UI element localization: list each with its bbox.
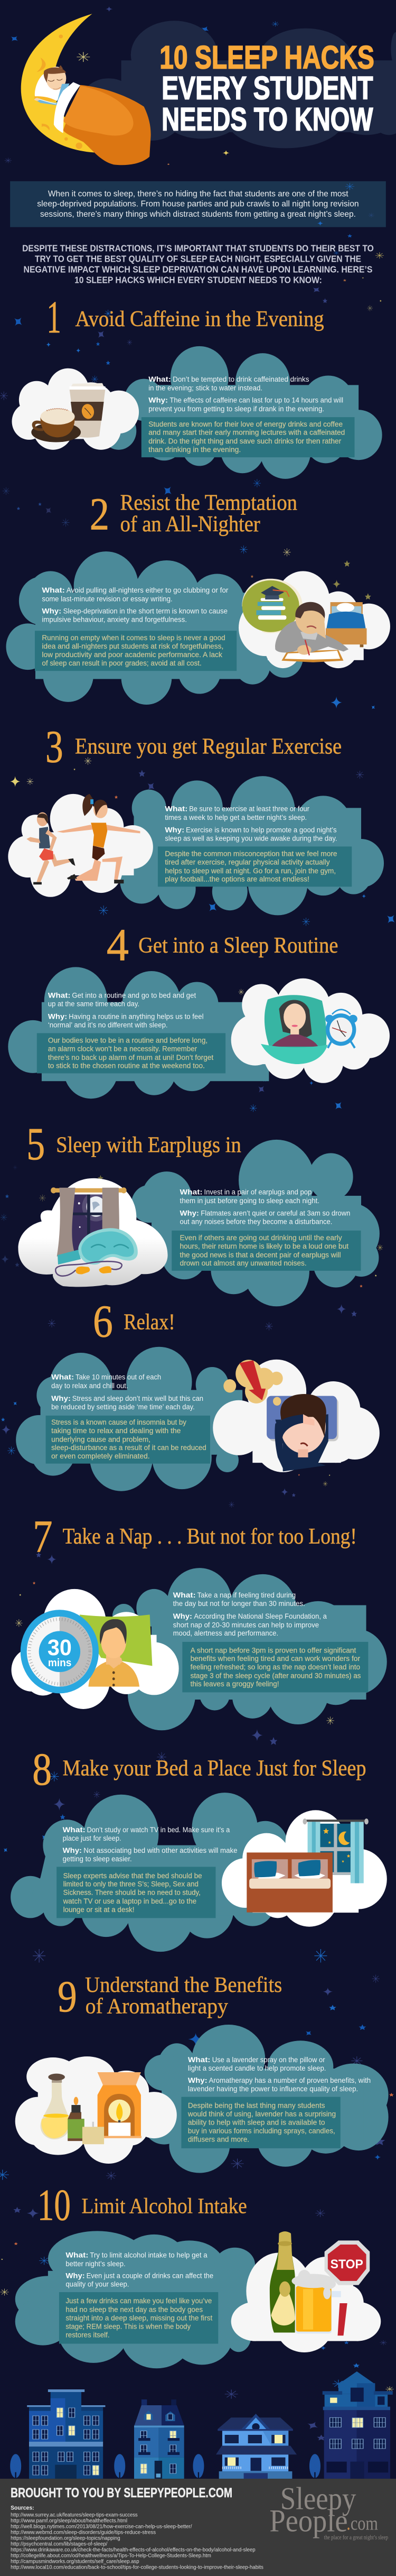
panel 8 text: Not associating bed with other activities will make [83, 1846, 238, 1854]
panel 7 text: short nap of 20-30 minutes can help to improve [173, 1621, 319, 1629]
sources list: http://collegelife.about.com/od/healthwellness/a/Tips-To-Help-College-Students-Sleep.htm [11, 2552, 211, 2559]
teal cloud panel 2 [6, 551, 303, 705]
panel 7 text [173, 1591, 327, 1637]
panel 2 text [42, 586, 229, 623]
panel 3 highlight box: tired after exercise, regular physical activity actually [165, 858, 330, 866]
panel 1 text: in the evening; stick to water instead. [148, 384, 262, 392]
icon: stop sign [325, 2240, 370, 2335]
sections 5 and 6 [1, 1119, 383, 1564]
panel 2 text: What: [42, 586, 65, 594]
panel 2 text: Sleep-deprivation in the short term is known to cause [63, 607, 228, 615]
intro panel [10, 181, 386, 227]
icon: 30 minute timer [21, 1610, 99, 1693]
icon: woman sleeping on pillow [261, 995, 328, 1064]
panel 3 highlight box: play football...the options are almost endless! [165, 875, 309, 883]
teal cloud panel 1 [101, 346, 382, 479]
panel 1 highlight box: and many start their early morning lectures with a caffeinated [148, 428, 345, 437]
sections 7 and 8 [2, 1568, 387, 1983]
panel 2 highlight box: of sleep can result in poor grades; avoid at all cost. [42, 659, 202, 667]
panel 7 highlight box: A short nap before 3pm is proven to offer significant [191, 1646, 356, 1654]
moon [21, 14, 101, 153]
panel 1 text: What: [148, 375, 171, 383]
heading 9: of Aromatherapy [86, 1995, 228, 2018]
panel 5 text: Invest in a pair of earplugs and pop [204, 1188, 312, 1196]
panel 7 text: the day but not for longer than 30 minutes. [173, 1600, 305, 1608]
dark cloud behind title [81, 21, 396, 148]
icon: small candle [82, 2122, 104, 2144]
white cloud with eye mask and window [18, 1178, 168, 1287]
heading 10 [37, 2180, 247, 2230]
icon: earplugs [55, 1261, 122, 1276]
icon: bed with pillows [247, 1852, 333, 1913]
panel 8 highlight box [56, 1867, 215, 1918]
panel 7 highlight box: this leaves a groggy feeling! [191, 1680, 279, 1688]
icon: alarm clock [325, 1010, 357, 1048]
panel 5 highlight box: drown out almost any unwanted noises. [180, 1259, 307, 1267]
heading 6: 6 [93, 1296, 113, 1347]
stars around sections 5 and 6 [1, 1165, 383, 1564]
panel 3 text [165, 805, 337, 843]
panel 1 highlight box: drink. Do the right thing and save such drinks for then rather [148, 437, 342, 445]
panel 2 highlight box [35, 631, 237, 671]
panel 10 highlight box: stage; REM sleep. This is when the body [65, 2323, 191, 2331]
panel 7 text: Take a nap if feeling tired during [197, 1591, 296, 1599]
town stars [225, 2340, 394, 2441]
panel 1 text: Why: [148, 396, 168, 404]
heading 2: of an All-Nighter [120, 512, 260, 536]
icon: stop sign: STOP [331, 2257, 363, 2271]
icon: student writing [275, 602, 348, 662]
panel 8 highlight box: watch TV or use a laptop in bed...go to the [63, 1897, 196, 1905]
panel 9 highlight box: buy in various forms including sprays, candles, [188, 2127, 335, 2135]
panel 1 text: prevent you from getting to sleep if drank in the evening. [148, 404, 324, 413]
heading 9: 9 [58, 1971, 77, 2021]
icon: man napping on pillow [80, 1614, 152, 1687]
icon: stress cloud with red arrow [223, 1360, 283, 1406]
sections 9 and 10 [0, 1971, 394, 2368]
heading 5 [26, 1119, 241, 1170]
panel 1 text: Don’t be tempted to drink caffeinated drinks [173, 375, 309, 383]
sources list: http://psychcentral.com/lib/stages-of-sleep/ [11, 2541, 108, 2547]
sources list: http://campusmindworks.org/students/self_care/sleep.asp [11, 2558, 139, 2564]
heading 7 [33, 1511, 357, 1562]
building 1 [27, 2389, 105, 2479]
heading 8: Make your Bed a Place Just for Sleep [63, 1756, 366, 1780]
stars around sections 9 and 10 [0, 1988, 394, 2295]
panel 4 highlight box: Our bodies love to be in a routine and before long, [48, 1036, 208, 1045]
panel 7 highlight box [182, 1642, 368, 1692]
heading 2: 2 [90, 489, 109, 540]
panel 4 text: ‘normal’ and it’s no different with sleep. [48, 1021, 168, 1029]
panel 5 highlight box [172, 1231, 361, 1271]
intro text [37, 189, 359, 218]
icon: sleep mask [58, 1228, 138, 1264]
building 4 [323, 2371, 393, 2479]
panel 9 text: Use a lavender spray on the pillow or [212, 2056, 325, 2064]
intro statement in capitals [22, 244, 374, 285]
panel 6 text: Take 10 minutes out of each [76, 1373, 161, 1381]
icon: 30 minute timer: 30 [48, 1635, 72, 1660]
teal cloud panel 10 [15, 2231, 255, 2368]
panel 4 text [48, 991, 204, 1029]
panel 3 text: What: [165, 805, 187, 813]
icon: 30 minute timer: mins [48, 1657, 71, 1669]
panel 5 text: What: [180, 1188, 203, 1196]
panel 8 text: Don’t study or watch TV in bed. Make sure it’s a [87, 1826, 230, 1834]
panel 9 text: What: [188, 2056, 210, 2064]
panel 10 text: What: [65, 2251, 88, 2259]
white cloud with runners [8, 794, 153, 897]
icon: mug of beer [291, 2270, 341, 2333]
white cloud with alcohol and stop sign [231, 2231, 381, 2352]
panel 2 highlight box: Running on empty when it comes to sleep is never a good [42, 634, 225, 642]
white cloud with aromatherapy items [15, 2056, 177, 2164]
panel 5 text: Flatmates aren’t quiet or careful at 3am so drown [201, 1209, 350, 1217]
heading 3: Ensure you get Regular Exercise [75, 734, 342, 759]
orange blanket [54, 82, 151, 165]
panel 5 text: Why: [180, 1209, 199, 1217]
sources list [11, 2512, 263, 2570]
teal cloud panel 4 [8, 967, 269, 1098]
panel 6 highlight box: underlying cause and problem, [51, 1435, 150, 1443]
teal cloud panel 9 [144, 2025, 389, 2173]
heading 8: 8 [32, 1744, 52, 1795]
panel 10 highlight box [59, 2292, 218, 2344]
stars around sections 1 and 2 [0, 298, 382, 711]
panel 8 text: place just for sleep. [63, 1834, 121, 1842]
sections 3 and 4 [8, 722, 396, 1113]
building 2 [134, 2399, 184, 2479]
panel 10 highlight box: Just a few drinks can make you feel like you’ve [65, 2297, 212, 2305]
sources list: http://www.pamf.org/sleep/about/healtheffects.html [11, 2517, 127, 2524]
panel 3 highlight box: Despite the common misconception that we feel more [165, 850, 337, 858]
white cloud with sleeper and clock [231, 978, 390, 1083]
icon: dropper bottle [68, 2097, 84, 2141]
white cloud with student [239, 571, 390, 668]
footer [0, 2479, 396, 2576]
panel 6 highlight box: or even completely eliminated. [51, 1452, 150, 1460]
heading 6 [93, 1296, 175, 1347]
panel 10 text: better night’s sleep. [65, 2260, 126, 2268]
heading 4: Get into a Sleep Routine [138, 933, 338, 957]
white cloud with coffee [12, 368, 139, 450]
panel 9 highlight box: would think of using, lavender has a surprising [187, 2110, 336, 2118]
panel 3 text: Exercise is known to help promote a good night’s [186, 826, 337, 834]
panel 3 text: sleep as well as keeping you wide awake during the day. [165, 834, 337, 843]
icon: bed [326, 602, 366, 647]
panel 3 highlight box [158, 846, 352, 887]
panel 4 highlight box: there’s no back up alarm of mum at uni! Don’t forget [48, 1054, 213, 1061]
white cloud with nap timer [12, 1589, 179, 1709]
white cloud with bed and window [222, 1810, 387, 1927]
panel 3 highlight box: helps to sleep well at night. Go for a run, join the gym, [165, 866, 336, 875]
icon: carafe of oil [40, 2074, 70, 2139]
heading 1: Avoid Caffeine in the Evening [76, 307, 324, 331]
heading 3 [45, 722, 342, 772]
panel 6 text: be reduced by setting aside ‘me time’ each day. [51, 1403, 195, 1411]
panel 1 highlight box [142, 417, 355, 457]
sources list: http://www.webmd.com/sleep-disorders/guide/tips-reduce-stress [11, 2529, 156, 2535]
sources list: https://www.drinkaware.co.uk/check-the-facts/health-effects-of-alcohol/effects-on-the-body/alcohol-and-sleep [11, 2546, 256, 2553]
heading 9 [58, 1971, 282, 2021]
sources list: http://www.surrey.ac.uk/features/sleep-tips-exam-success [11, 2512, 138, 2518]
teal cloud panel 6 [16, 1347, 242, 1491]
white cloud with stressed sleeper [213, 1360, 380, 1472]
panel 9 text [188, 2056, 371, 2093]
teal cloud panel 3 [120, 776, 384, 915]
panel 8 text: getting to sleep easier. [63, 1855, 132, 1863]
panel 8 highlight box: lounge or sit at a desk! [63, 1906, 134, 1914]
icon: paper coffee cup [70, 383, 105, 438]
panel 1 text: The effects of caffeine can last for up to 14 hours and will [169, 396, 343, 404]
panel 7 text: According the National Sleep Foundation, a [194, 1612, 327, 1620]
panel 3 text: times a week to help get a better night’s sleep. [165, 813, 307, 821]
panel 10 highlight box: restores itself. [65, 2331, 110, 2339]
panel 8 highlight box: Sickness. There should be no need to study, [63, 1888, 201, 1897]
heading 7: 7 [33, 1511, 52, 1562]
sources list: https://sleepfoundation.org/sleep-topics/napping [11, 2535, 120, 2541]
building 3 [216, 2414, 297, 2479]
panel 9 highlight box [181, 2097, 341, 2148]
panel 4 highlight box: to stick to the chosen routine at the weekend too. [48, 1061, 205, 1070]
panel 10 highlight box: straight into a deep sleep, missing out the first [65, 2314, 213, 2322]
heading 6: Relax! [124, 1309, 175, 1334]
heading 3: 3 [45, 722, 63, 772]
icon: champagne bottle [270, 2231, 295, 2333]
panel 5 text: them in just before going to sleep each night. [180, 1196, 319, 1205]
panel 9 highlight box: ability to help with sleep and is available to [188, 2119, 325, 2127]
heading 10: 10 [37, 2180, 71, 2230]
panel 2 text: Why: [42, 607, 61, 615]
icon: cappuccino cup [31, 409, 81, 442]
panel 10 text [65, 2251, 213, 2288]
icon: sleeper with arm over face [267, 1394, 338, 1471]
sources list: http://well.blogs.nytimes.com/2013/08/21/how-exercise-can-help-us-sleep-better/ [11, 2523, 192, 2529]
panel 9 text: Why: [188, 2076, 208, 2084]
sources heading: Sources: [11, 2504, 34, 2511]
panel 6 highlight box: sleep-disturbance as a result of it can be reduced [51, 1444, 206, 1452]
panel 8 highlight box: Sleep experts advise that the bed should be [63, 1871, 202, 1880]
icon: oil burner with candle [98, 2072, 142, 2138]
teal cloud panel 8 [11, 1793, 288, 1952]
heading 9: Understand the Benefits [85, 1973, 282, 1997]
panel 5 highlight box: the good news is that a decent pair of earplugs will [180, 1251, 341, 1259]
panel 6 text: Why: [51, 1394, 71, 1402]
heading 5: Sleep with Earplugs in [56, 1132, 241, 1157]
panel 10 text: Try to limit alcohol intake to help get a [90, 2251, 208, 2259]
panel 7 highlight box: stage 3 of the sleep cycle (after around 30 minutes) as [191, 1672, 361, 1679]
panel 2 highlight box: low productivity and poor academic performance. A lack [42, 651, 222, 659]
teal cloud panel 5 [131, 1140, 380, 1306]
panel 4 text: up at the same time each day. [48, 1000, 139, 1008]
panel 4 text: What: [48, 991, 70, 1000]
town and footer [0, 2340, 396, 2576]
panel 10 text: Why: [65, 2272, 85, 2280]
logo: Sleepy People: People [269, 2504, 348, 2538]
sections 1 and 2 [0, 292, 390, 711]
panel 1 text [148, 375, 343, 413]
panel 9 highlight box: diffusers and more. [188, 2136, 249, 2144]
logo: Sleepy People [269, 2481, 388, 2541]
sleeping student [34, 65, 70, 106]
panel 5 highlight box: hours, their return home is likely to be a loud one but [180, 1242, 348, 1250]
panel 8 text: What: [63, 1826, 86, 1834]
sources list: http://www.local10.com/education/back-to-school/tips-for-college-students-looking-to-improve-their-sleep-habits [11, 2564, 263, 2570]
icon: window and curtains [51, 1187, 127, 1257]
heading 7: Take a Nap . . . But not for too Long! [63, 1524, 357, 1548]
heading 1 [46, 292, 324, 343]
panel 4 highlight box [37, 1033, 225, 1073]
panel 9 highlight box: Despite being the last thing many students [188, 2102, 325, 2110]
panel 5 text [180, 1188, 350, 1226]
panel 3 text: Be sure to exercise at least three or four [189, 805, 309, 813]
panel 7 text: mood, alertness and performance. [173, 1629, 278, 1637]
panel 7 text: What: [173, 1591, 196, 1599]
panel 6 text [51, 1373, 203, 1411]
icon: night window [303, 1818, 369, 1883]
panel 7 highlight box: feeling refreshed; so long as the nap doesn’t lead into [191, 1663, 360, 1671]
teal cloud panel 7 [112, 1568, 387, 1730]
panel 4 text: Having a routine in anything helps us to feel [69, 1012, 204, 1020]
heading 2: Resist the Temptation [120, 490, 297, 515]
panel 2 highlight box: idea and all-nighters put students at risk of forgetfulness, [42, 642, 223, 650]
header stars [5, 6, 384, 294]
panel 4 text: Why: [48, 1012, 67, 1020]
icon: male runner [26, 812, 76, 884]
panel 2 text: impulsive behaviour, anxiety and forgetfulness. [42, 615, 187, 623]
panel 6 highlight box [46, 1416, 210, 1464]
panel 4 highlight box: an alarm clock won’t be a necessity. Remember [48, 1045, 197, 1053]
panel 8 highlight box: limited to only the three S’s; Sleep, Sex and [63, 1880, 199, 1888]
trees [10, 2454, 320, 2479]
panel 6 text: Stress and sleep don’t mix well but this can [72, 1394, 203, 1402]
title [159, 40, 374, 137]
stars around sections 7 and 8 [2, 1582, 380, 1983]
heading 5: 5 [26, 1119, 45, 1170]
panel 8 text [63, 1826, 238, 1863]
panel 7 highlight box: benefits when feeling tired and can work wonders for [191, 1655, 361, 1663]
panel 10 text: Even just a couple of drinks can affect the [87, 2272, 213, 2280]
icon: female athlete lunging [57, 794, 140, 883]
heading 10: Limit Alcohol Intake [81, 2194, 247, 2218]
heading 4 [107, 920, 338, 971]
panel 4 text: Get into a routine and go to bed and get [72, 991, 196, 1000]
panel 1 highlight box: than drinking in the evening. [148, 446, 241, 454]
icon: thought bubble with books [242, 579, 303, 633]
heading 2 [90, 489, 297, 540]
panel 6 highlight box: Stress is a known cause of insomnia but by [51, 1418, 186, 1426]
heading 1: 1 [46, 292, 61, 343]
panel 5 text: out any noises before they become a disturbance. [180, 1217, 332, 1226]
panel 6 text: day to relax and chill out. [51, 1381, 128, 1390]
panel 10 text: quality of your sleep. [65, 2280, 129, 2288]
panel 6 text: What: [51, 1373, 74, 1381]
stars around sections 3 and 4 [10, 757, 396, 1113]
panel 7 text: Why: [173, 1612, 192, 1620]
panel 10 highlight box: had no sleep the next day as the body goes [65, 2306, 203, 2314]
panel 1 highlight box: Students are known for their love of energy drinks and coffee [148, 420, 343, 428]
panel 6 highlight box: taking time to relax and dealing with the [51, 1427, 181, 1435]
panel 9 text: light a scented candle to help promote sleep. [188, 2064, 326, 2072]
panel 2 text: Avoid pulling all-nighters either to go clubbing or for [67, 586, 229, 594]
panel 8 text: Why: [63, 1846, 82, 1854]
header section [5, 6, 396, 294]
heading 8 [32, 1744, 366, 1795]
panel 5 highlight box: Even if others are going out drinking until the early [180, 1234, 342, 1242]
panel 2 text: some last-minute revision or essay writing. [42, 595, 173, 603]
panel 3 text: Why: [165, 826, 184, 834]
heading 4: 4 [107, 920, 129, 971]
